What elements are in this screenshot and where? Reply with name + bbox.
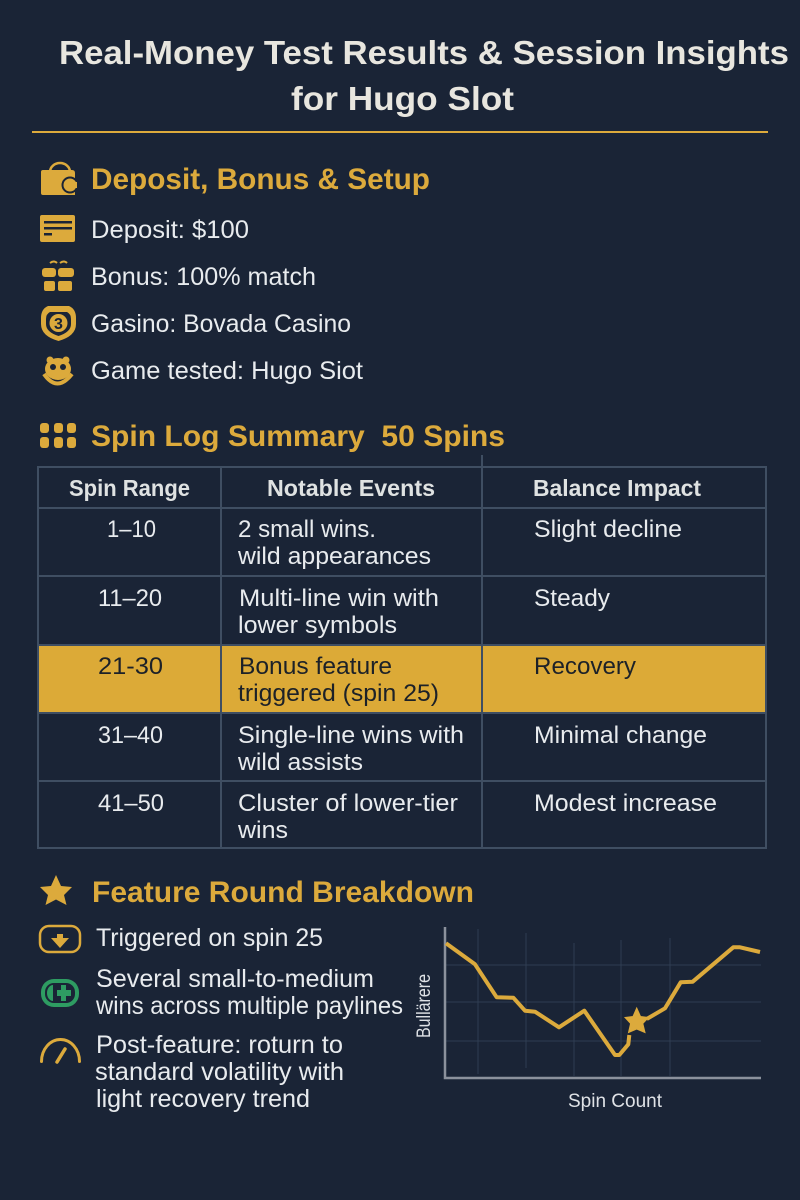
wins text: Several small-to-medium xyxy=(96,965,374,993)
panel: feature round breakdown xyxy=(40,875,761,1113)
table header xyxy=(69,475,701,501)
heading: feature round breakdown: Feature Round Breakdown xyxy=(92,876,474,909)
row 41-50: Modest increase xyxy=(534,790,717,817)
row 1-10: wild appearances xyxy=(237,543,431,570)
row 41-50: 41–50 xyxy=(98,790,164,817)
title: Real-Money Test Results & Session Insights xyxy=(59,34,789,71)
icon: star xyxy=(40,875,72,905)
row 11-20: Steady xyxy=(534,585,610,612)
row 31-40: Minimal change xyxy=(534,722,707,749)
row 21-30: triggered (spin 25) xyxy=(238,680,439,707)
icon: shield 3: 3 xyxy=(54,316,63,333)
row 41-50 xyxy=(98,790,717,844)
wins text xyxy=(95,965,403,1020)
row 31-40: Single-line wins with xyxy=(238,722,464,749)
row 1-10: Slight decline xyxy=(534,516,682,543)
icon: wallet xyxy=(41,163,78,195)
row 21-30: Recovery xyxy=(534,653,636,680)
post-feature text: Post-feature: roturn to xyxy=(96,1031,343,1059)
row 1-10 xyxy=(107,516,682,570)
row 41-50: wins xyxy=(237,817,288,844)
deposit item: Deposit: $100 xyxy=(91,216,249,244)
heading: spin log summary: Spin Log Summary 50 Spins xyxy=(91,420,505,453)
row 11-20 xyxy=(98,585,610,639)
icon: hugo face xyxy=(44,356,72,384)
y axis label: Bullärere xyxy=(414,974,435,1038)
table xyxy=(38,455,766,848)
icon: trigger pill xyxy=(40,926,80,952)
row 31-40 xyxy=(98,722,707,776)
table header: Balance Impact xyxy=(533,475,701,501)
chart axes xyxy=(445,927,761,1078)
icon: green battery xyxy=(41,979,79,1007)
post-feature text: light recovery trend xyxy=(96,1085,310,1113)
table header: Notable Events xyxy=(267,475,435,501)
title: for Hugo Slot xyxy=(291,80,514,117)
row 31-40: wild assists xyxy=(237,749,363,776)
row 41-50: Cluster of lower-tier xyxy=(238,790,458,817)
casino item: Gasino: Bovada Casino xyxy=(91,310,351,338)
trigger text: Triggered on spin 25 xyxy=(96,924,323,952)
row 11-20: Multi-line win with xyxy=(239,585,439,612)
balance line xyxy=(446,943,760,1055)
highlighted row xyxy=(38,645,766,713)
bonus item: Bonus: 100% match xyxy=(91,263,316,291)
row 21-30 xyxy=(98,653,636,707)
row 31-40: 31–40 xyxy=(98,722,163,749)
icon: shield 3 xyxy=(41,306,76,341)
table header: Spin Range xyxy=(69,475,190,501)
feature star marker xyxy=(625,1008,648,1032)
row 11-20: 11–20 xyxy=(98,585,162,612)
icon: gift xyxy=(42,262,74,291)
panel: deposit, bonus and setup xyxy=(40,163,430,385)
post-feature text: standard volatility with xyxy=(95,1058,344,1086)
line chart xyxy=(414,927,761,1112)
row 1-10: 2 small wins. xyxy=(238,516,376,543)
row 21-30: Bonus feature xyxy=(239,653,392,680)
wins text: wins across multiple paylines xyxy=(95,992,403,1020)
row 21-30: 21-30 xyxy=(98,653,163,680)
panel: spin log summary xyxy=(38,420,766,848)
icon: grid xyxy=(40,423,76,448)
game item: Game tested: Hugo Siot xyxy=(91,357,363,385)
x axis label: Spin Count xyxy=(568,1091,663,1112)
icon: card xyxy=(40,215,75,242)
post-feature text xyxy=(95,1031,344,1113)
row 1-10: 1–10 xyxy=(107,516,156,543)
icon: gauge xyxy=(42,1040,80,1062)
row 11-20: lower symbols xyxy=(238,612,397,639)
heading: deposit, bonus and setup: Deposit, Bonus & Setup xyxy=(91,163,430,196)
title xyxy=(59,34,789,117)
